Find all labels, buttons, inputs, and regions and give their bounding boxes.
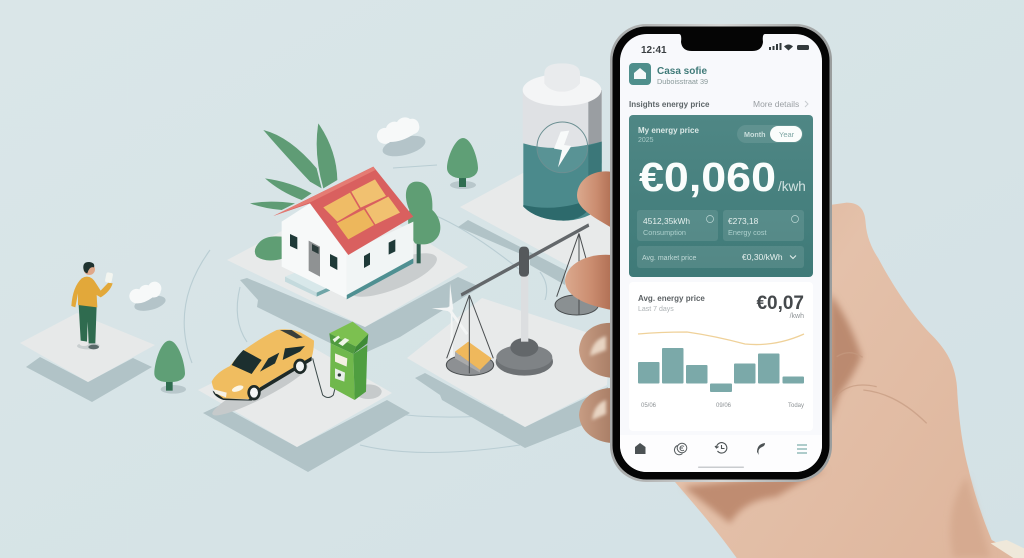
app header: Casa sofie	[657, 66, 707, 77]
stat: market price: Avg. market price	[642, 255, 696, 262]
beam	[461, 223, 589, 297]
icon: tree	[154, 341, 186, 394]
notch	[679, 34, 765, 51]
icon: cloud near house	[377, 117, 428, 160]
panel: my energy price: My energy price	[638, 126, 699, 135]
phone	[610, 24, 832, 482]
house side wall	[347, 222, 413, 298]
home indicator	[698, 466, 744, 468]
panel: average energy price	[629, 282, 813, 431]
stat: market price	[637, 246, 804, 268]
section heading: More details	[753, 99, 799, 109]
orbit lines	[184, 165, 560, 452]
charging cable	[313, 358, 338, 397]
charge bolt	[554, 131, 571, 167]
house base strip	[347, 258, 413, 299]
toggle	[737, 125, 803, 143]
chart axis labels: 09/06	[716, 403, 732, 409]
car windscreen	[232, 350, 262, 374]
big price: €0,060	[639, 154, 776, 200]
platform: scale	[407, 298, 610, 448]
icon: home	[635, 443, 646, 454]
stat: consumption	[637, 210, 718, 241]
panel: my energy price: 2025	[638, 137, 654, 144]
panel: average energy price: /kwh	[790, 313, 804, 320]
section heading	[629, 99, 808, 109]
icon: history	[715, 443, 727, 453]
chart axis labels	[641, 403, 804, 409]
hub	[519, 247, 529, 277]
finger 4	[579, 388, 612, 443]
palm and thumb	[673, 203, 1024, 558]
windows and door	[290, 234, 395, 277]
icon: home tile	[629, 63, 651, 85]
house front wall	[282, 203, 347, 298]
car lights	[231, 384, 244, 393]
icon: house	[250, 123, 442, 305]
car wheels	[247, 385, 261, 400]
base	[496, 348, 553, 376]
panel: average energy price: Last 7 days	[638, 306, 674, 313]
phone body	[610, 24, 832, 482]
icon: tree near battery	[447, 138, 478, 189]
right pan	[555, 233, 598, 315]
sleeve cuff	[991, 540, 1024, 558]
stat: consumption: 4512,35kWh	[643, 216, 690, 226]
icon: car	[209, 329, 314, 422]
battery cap	[544, 63, 580, 92]
chart axis labels: 05/06	[641, 403, 657, 409]
post	[521, 273, 528, 342]
finger 2	[565, 255, 612, 310]
finger 3	[579, 323, 612, 378]
status bar: 12:41	[641, 45, 667, 56]
platform: person	[20, 313, 155, 402]
screen	[620, 34, 822, 472]
stat: market price: €0,30/kWh	[742, 252, 783, 262]
icon: coins	[674, 443, 687, 455]
icon: balance scale	[432, 223, 598, 376]
finger highlights	[590, 336, 606, 420]
battery top	[523, 74, 601, 106]
battery charge	[523, 142, 602, 221]
icon: tree behind house	[406, 182, 440, 263]
app header	[629, 63, 708, 86]
icon: plant leaves	[250, 123, 337, 210]
finger 1	[577, 171, 612, 228]
platform: house	[227, 195, 480, 352]
stat: energy cost	[723, 210, 804, 241]
palm creases	[833, 353, 927, 423]
icon: person and objects on left	[71, 262, 382, 422]
bar chart	[638, 348, 804, 392]
icon: menu	[797, 445, 807, 453]
stat: energy cost: Energy cost	[728, 228, 767, 237]
person	[71, 262, 113, 349]
status bar	[641, 43, 809, 56]
line chart	[638, 332, 804, 345]
panel: average energy price: €0,07	[756, 293, 804, 314]
left pan	[446, 295, 494, 375]
toggle: Year	[779, 130, 795, 139]
battery shell	[523, 90, 602, 165]
chart axis labels: Today	[788, 403, 804, 409]
palm shading near phone	[683, 293, 991, 558]
app header: Duboisstraat 39	[657, 77, 708, 86]
icon: battery	[523, 63, 602, 221]
car side windows	[260, 353, 279, 372]
icon: bush	[255, 236, 283, 260]
charge bolt ring	[537, 122, 588, 173]
icon: cloud	[129, 282, 167, 314]
house steps	[285, 269, 330, 297]
stat: energy cost: €273,18	[728, 216, 759, 226]
platform: battery	[458, 173, 610, 285]
platform: car	[198, 340, 410, 472]
section heading: Insights energy price	[629, 100, 710, 109]
toggle: Month	[744, 130, 766, 139]
fingers	[565, 171, 612, 443]
icon: charging station	[329, 322, 382, 400]
panel: my energy price: /kwh	[778, 179, 806, 194]
roof	[273, 167, 413, 255]
bottom navigation	[620, 435, 822, 472]
wind turbine	[432, 283, 468, 365]
panel: average energy price: Avg. energy price	[638, 294, 705, 303]
solar panels	[323, 179, 400, 239]
icon: leaf	[757, 443, 765, 455]
stat: consumption: Consumption	[643, 228, 686, 237]
panel: my energy price	[629, 115, 813, 277]
hand	[673, 203, 1024, 558]
